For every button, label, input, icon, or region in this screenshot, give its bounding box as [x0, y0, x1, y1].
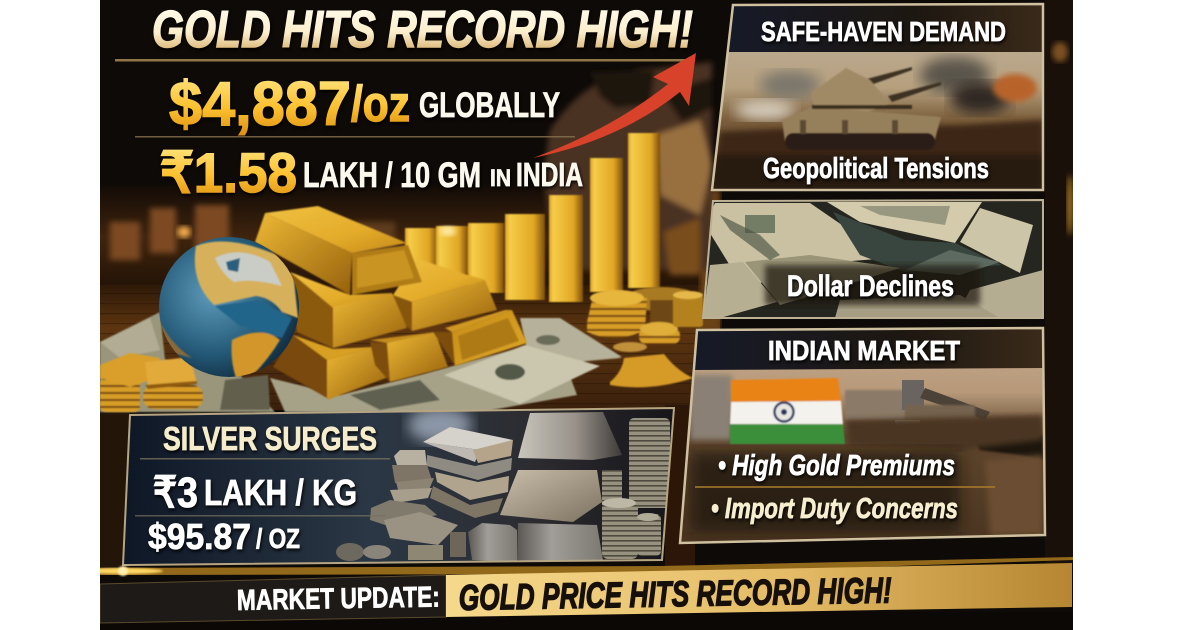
- global gold price: $4,887: [169, 70, 351, 139]
- India gold price: [160, 141, 583, 204]
- heading: Indian market: INDIAN MARKET: [768, 335, 960, 366]
- gold coin stacks, right: [587, 287, 703, 387]
- label: dollar declines: Dollar Declines: [787, 270, 954, 303]
- price rule: [135, 136, 575, 138]
- heading: safe-haven demand: SAFE-HAVEN DEMAND: [761, 16, 1006, 47]
- global gold price: GLOBALLY: [419, 86, 560, 125]
- middle row bars: [290, 259, 497, 348]
- global gold price: /oz: [351, 76, 410, 132]
- globe: [159, 237, 299, 378]
- silver bars and coins: [336, 407, 670, 562]
- panel: dollar declines: [703, 200, 1043, 318]
- ticker label: MARKET UPDATE:: [237, 581, 440, 617]
- ticker banner: [100, 563, 1072, 623]
- global gold price: [169, 70, 560, 139]
- label: geopolitical tensions: Geopolitical Tensions: [763, 153, 989, 185]
- title: GOLD HITS RECORD HIGH!: [152, 1, 693, 59]
- India gold price: LAKH / 10 GM: [303, 156, 481, 195]
- icon: tank: [782, 67, 941, 150]
- red rising arrow: [533, 53, 696, 158]
- dollar bills under gold: [100, 312, 622, 412]
- silver rupee price: ₹3: [153, 469, 198, 517]
- small stacked ingots: [394, 450, 427, 465]
- world map backdrop: [545, 62, 712, 275]
- bullet: high gold premiums: • High Gold Premiums: [718, 450, 955, 482]
- India gold price: INDIA: [516, 156, 583, 193]
- India gold price: IN: [490, 165, 511, 192]
- India gold price: ₹1.58: [160, 141, 297, 204]
- large ingots: [518, 412, 622, 460]
- silver rupee price: LAKH / KG: [204, 472, 357, 513]
- title rule: [115, 59, 695, 62]
- panel: safe-haven demand: [712, 4, 1043, 190]
- stacked gold bars: [255, 206, 527, 400]
- ingot stack: [423, 427, 513, 450]
- silver rupee price: [153, 469, 357, 517]
- ticker headline: GOLD PRICE HITS RECORD HIGH!: [458, 569, 892, 618]
- gold glow line: [83, 557, 1073, 576]
- top bar: [255, 206, 422, 295]
- bottom row bars: [273, 310, 527, 400]
- silver heading: SILVER SURGES: [163, 420, 377, 457]
- silver dollar price: / OZ: [256, 523, 300, 554]
- silver panel: [123, 407, 674, 565]
- rising bar chart: [405, 133, 660, 302]
- gold coin stacks, left: [100, 353, 203, 412]
- silver dollar price: $95.87: [148, 516, 251, 557]
- panel: Indian market: [680, 328, 1045, 543]
- bullet: import duty concerns: • Import Duty Concerns: [711, 493, 958, 525]
- icon: Indian flag: [730, 378, 845, 444]
